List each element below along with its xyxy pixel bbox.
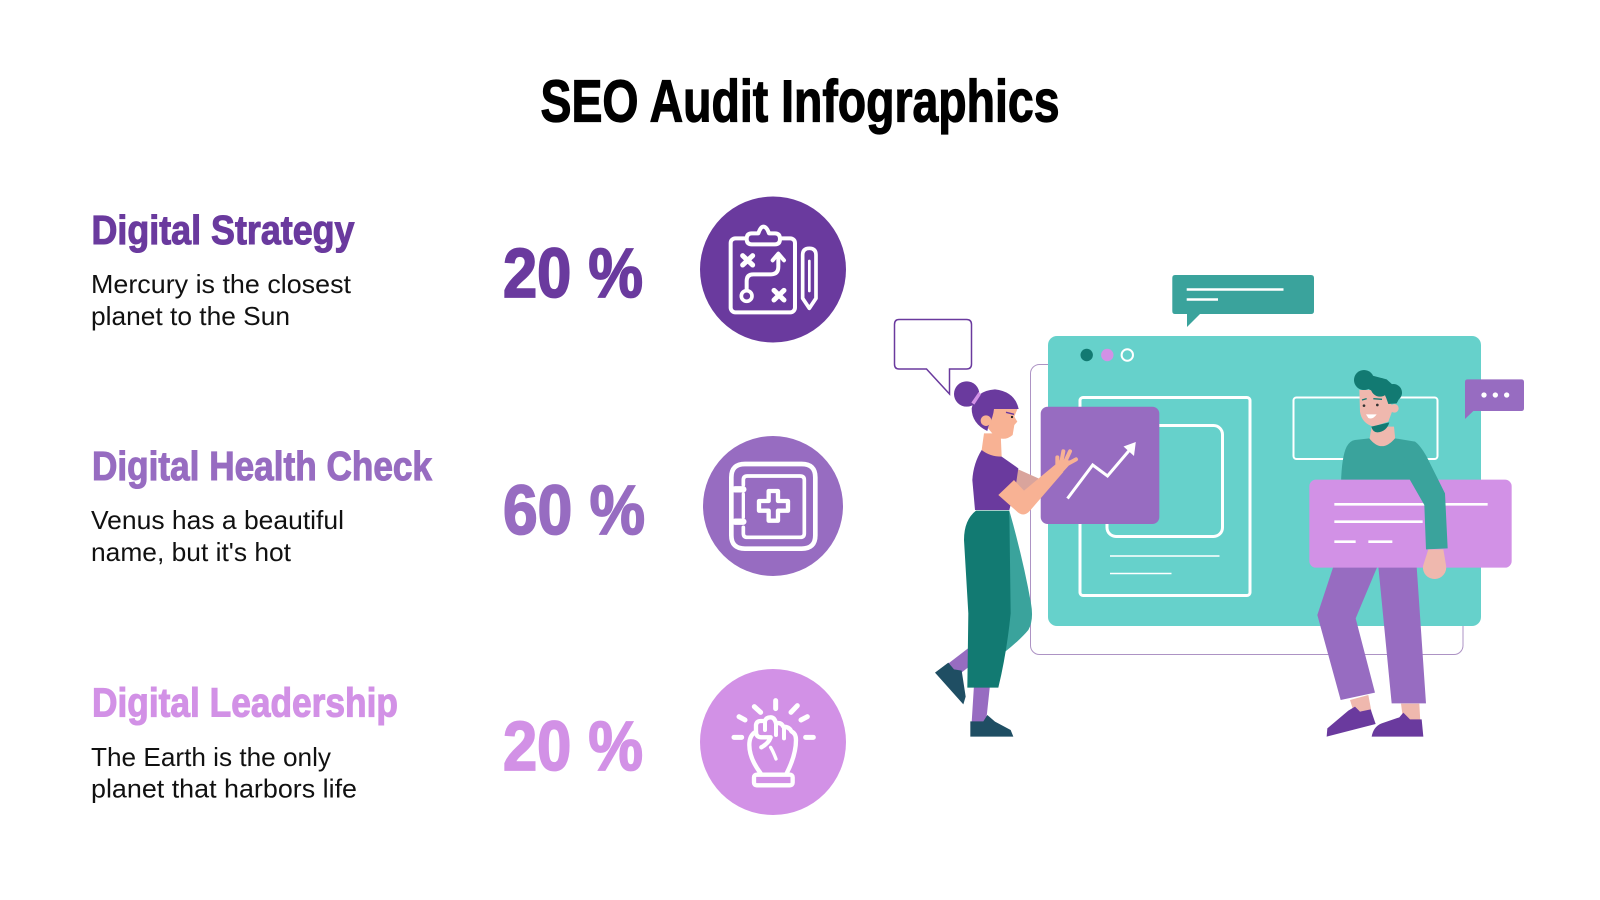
hair tie	[971, 392, 981, 405]
hair	[1354, 370, 1402, 404]
back leg	[948, 647, 970, 675]
skirt	[964, 511, 1011, 688]
hair	[972, 389, 1019, 431]
back arm	[1012, 469, 1041, 495]
speech bubble: teal	[1172, 275, 1314, 327]
text block: digital leadership description: The Earth is the only	[91, 742, 331, 772]
heading: digital leadership: Digital Leadership	[92, 680, 398, 726]
icon: health book	[703, 436, 843, 576]
beard	[1371, 422, 1389, 432]
neck	[1369, 427, 1395, 449]
text block: digital health check description	[91, 505, 344, 567]
hair bun	[954, 381, 979, 407]
face	[1359, 390, 1393, 427]
text block: digital health check description: Venus has a beautiful	[91, 505, 344, 535]
title: SEO Audit Infographics	[540, 68, 1060, 134]
ear	[1390, 404, 1399, 413]
chart card	[1041, 407, 1159, 524]
heading: digital strategy: Digital Strategy	[92, 207, 355, 253]
hand	[1423, 549, 1446, 579]
text block: digital leadership description: planet that harbors life	[91, 774, 357, 804]
person: man	[1309, 370, 1512, 737]
shirt	[972, 450, 1018, 510]
text block: digital strategy description: Mercury is the closest	[91, 269, 352, 299]
icon: clipboard strategy	[700, 196, 846, 342]
front arm	[998, 451, 1076, 514]
back outline panel	[1030, 364, 1463, 654]
panel: digital leadership	[91, 669, 846, 815]
text block: digital strategy description: planet to the Sun	[91, 301, 290, 331]
illustration: website and two people	[894, 275, 1524, 737]
info card	[1309, 480, 1512, 568]
speech bubble: outline	[894, 320, 972, 394]
speech bubble: purple dots	[1465, 379, 1524, 419]
shoes	[935, 663, 1013, 737]
skirt back panel	[1004, 511, 1032, 653]
text block: digital leadership description	[91, 742, 357, 804]
icon: raised fist	[700, 669, 846, 815]
percentage: 60 %: 60 %	[503, 471, 645, 549]
torso	[1341, 438, 1427, 483]
percentage: 20 %: 20 %	[503, 234, 643, 312]
eyes and mouth	[1362, 399, 1382, 419]
browser window panel	[1048, 336, 1481, 626]
panel: digital strategy	[91, 196, 846, 342]
heading: digital health check: Digital Health Check	[92, 443, 432, 489]
shoes	[1327, 707, 1423, 737]
ankles	[1350, 695, 1420, 722]
arm	[1403, 442, 1448, 549]
eye	[1006, 412, 1014, 414]
person: woman	[935, 381, 1076, 737]
face	[987, 407, 1018, 439]
legs	[1317, 567, 1426, 703]
text block: digital health check description: name, but it's hot	[91, 537, 292, 567]
neck	[982, 433, 1002, 457]
front leg	[972, 685, 990, 723]
panel: digital health check	[91, 436, 843, 576]
ear	[981, 415, 991, 426]
text block: digital strategy description	[91, 269, 352, 331]
percentage: 20 %: 20 %	[503, 707, 643, 785]
